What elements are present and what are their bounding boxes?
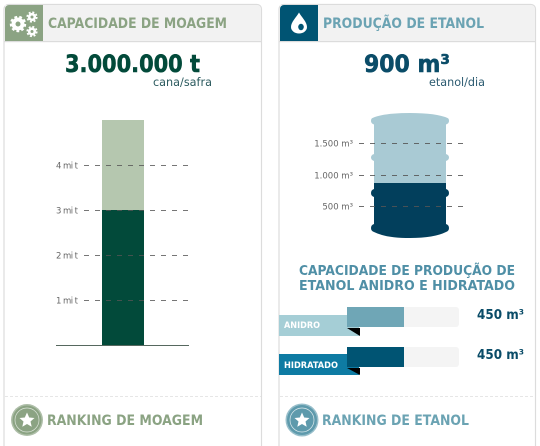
heading: producao de etanol: PRODUÇÃO DE ETANOL — [323, 15, 484, 32]
bar chart: moagem — [56, 120, 189, 346]
chart: barrel: 500 m³ — [322, 202, 353, 212]
bar: anidro: 450 m³ — [477, 308, 524, 323]
stat: 900 m3: 900 m³ — [364, 50, 450, 78]
panel: producao de etanol — [279, 4, 536, 446]
header: capacidade de moagem — [4, 5, 262, 42]
bar chart: moagem: 3 mi t — [56, 206, 79, 216]
chart: barrel: 1.000 m³ — [314, 172, 353, 182]
bar: hidratado — [279, 347, 524, 375]
heading: capacidade de producao — [299, 263, 515, 294]
ranking: moagem — [11, 404, 203, 436]
heading: ranking de etanol: RANKING DE ETANOL — [322, 413, 469, 429]
heading: ranking de moagem: RANKING DE MOAGEM — [47, 413, 203, 429]
ranking: etanol — [286, 404, 469, 436]
heading: capacidade de producao: ETANOL ANIDRO E HIDRATADO — [299, 279, 515, 294]
bar: anidro: ANIDRO — [284, 321, 320, 331]
icon: star badge — [286, 404, 318, 436]
bar chart: moagem: 2 mi t — [56, 252, 79, 262]
icon: star badge — [11, 404, 43, 436]
header: producao de etanol — [279, 5, 536, 42]
panel: capacidade de moagem — [4, 4, 262, 446]
chart: barrel — [314, 113, 464, 238]
chart: barrel: 1.500 m³ — [314, 140, 353, 150]
bar: hidratado: HIDRATADO — [284, 361, 338, 371]
stat unit: etanol/dia: etanol/dia — [429, 75, 485, 89]
bar chart: moagem: 1 mi t — [56, 296, 79, 306]
bar: anidro — [279, 307, 524, 336]
heading: capacidade de moagem: CAPACIDADE DE MOAGEM — [48, 16, 227, 32]
stat: 3.000.000 t: 3.000.000 t — [65, 50, 200, 78]
stat unit: cana/safra: cana/safra — [153, 75, 212, 89]
icon: water drop — [280, 5, 318, 41]
heading: capacidade de producao: CAPACIDADE DE PRODUÇÃO DE — [299, 263, 515, 279]
bar chart: moagem: 4 mi t — [56, 162, 79, 172]
bar: hidratado: 450 m³ — [477, 348, 524, 363]
icon: gears — [5, 5, 43, 41]
